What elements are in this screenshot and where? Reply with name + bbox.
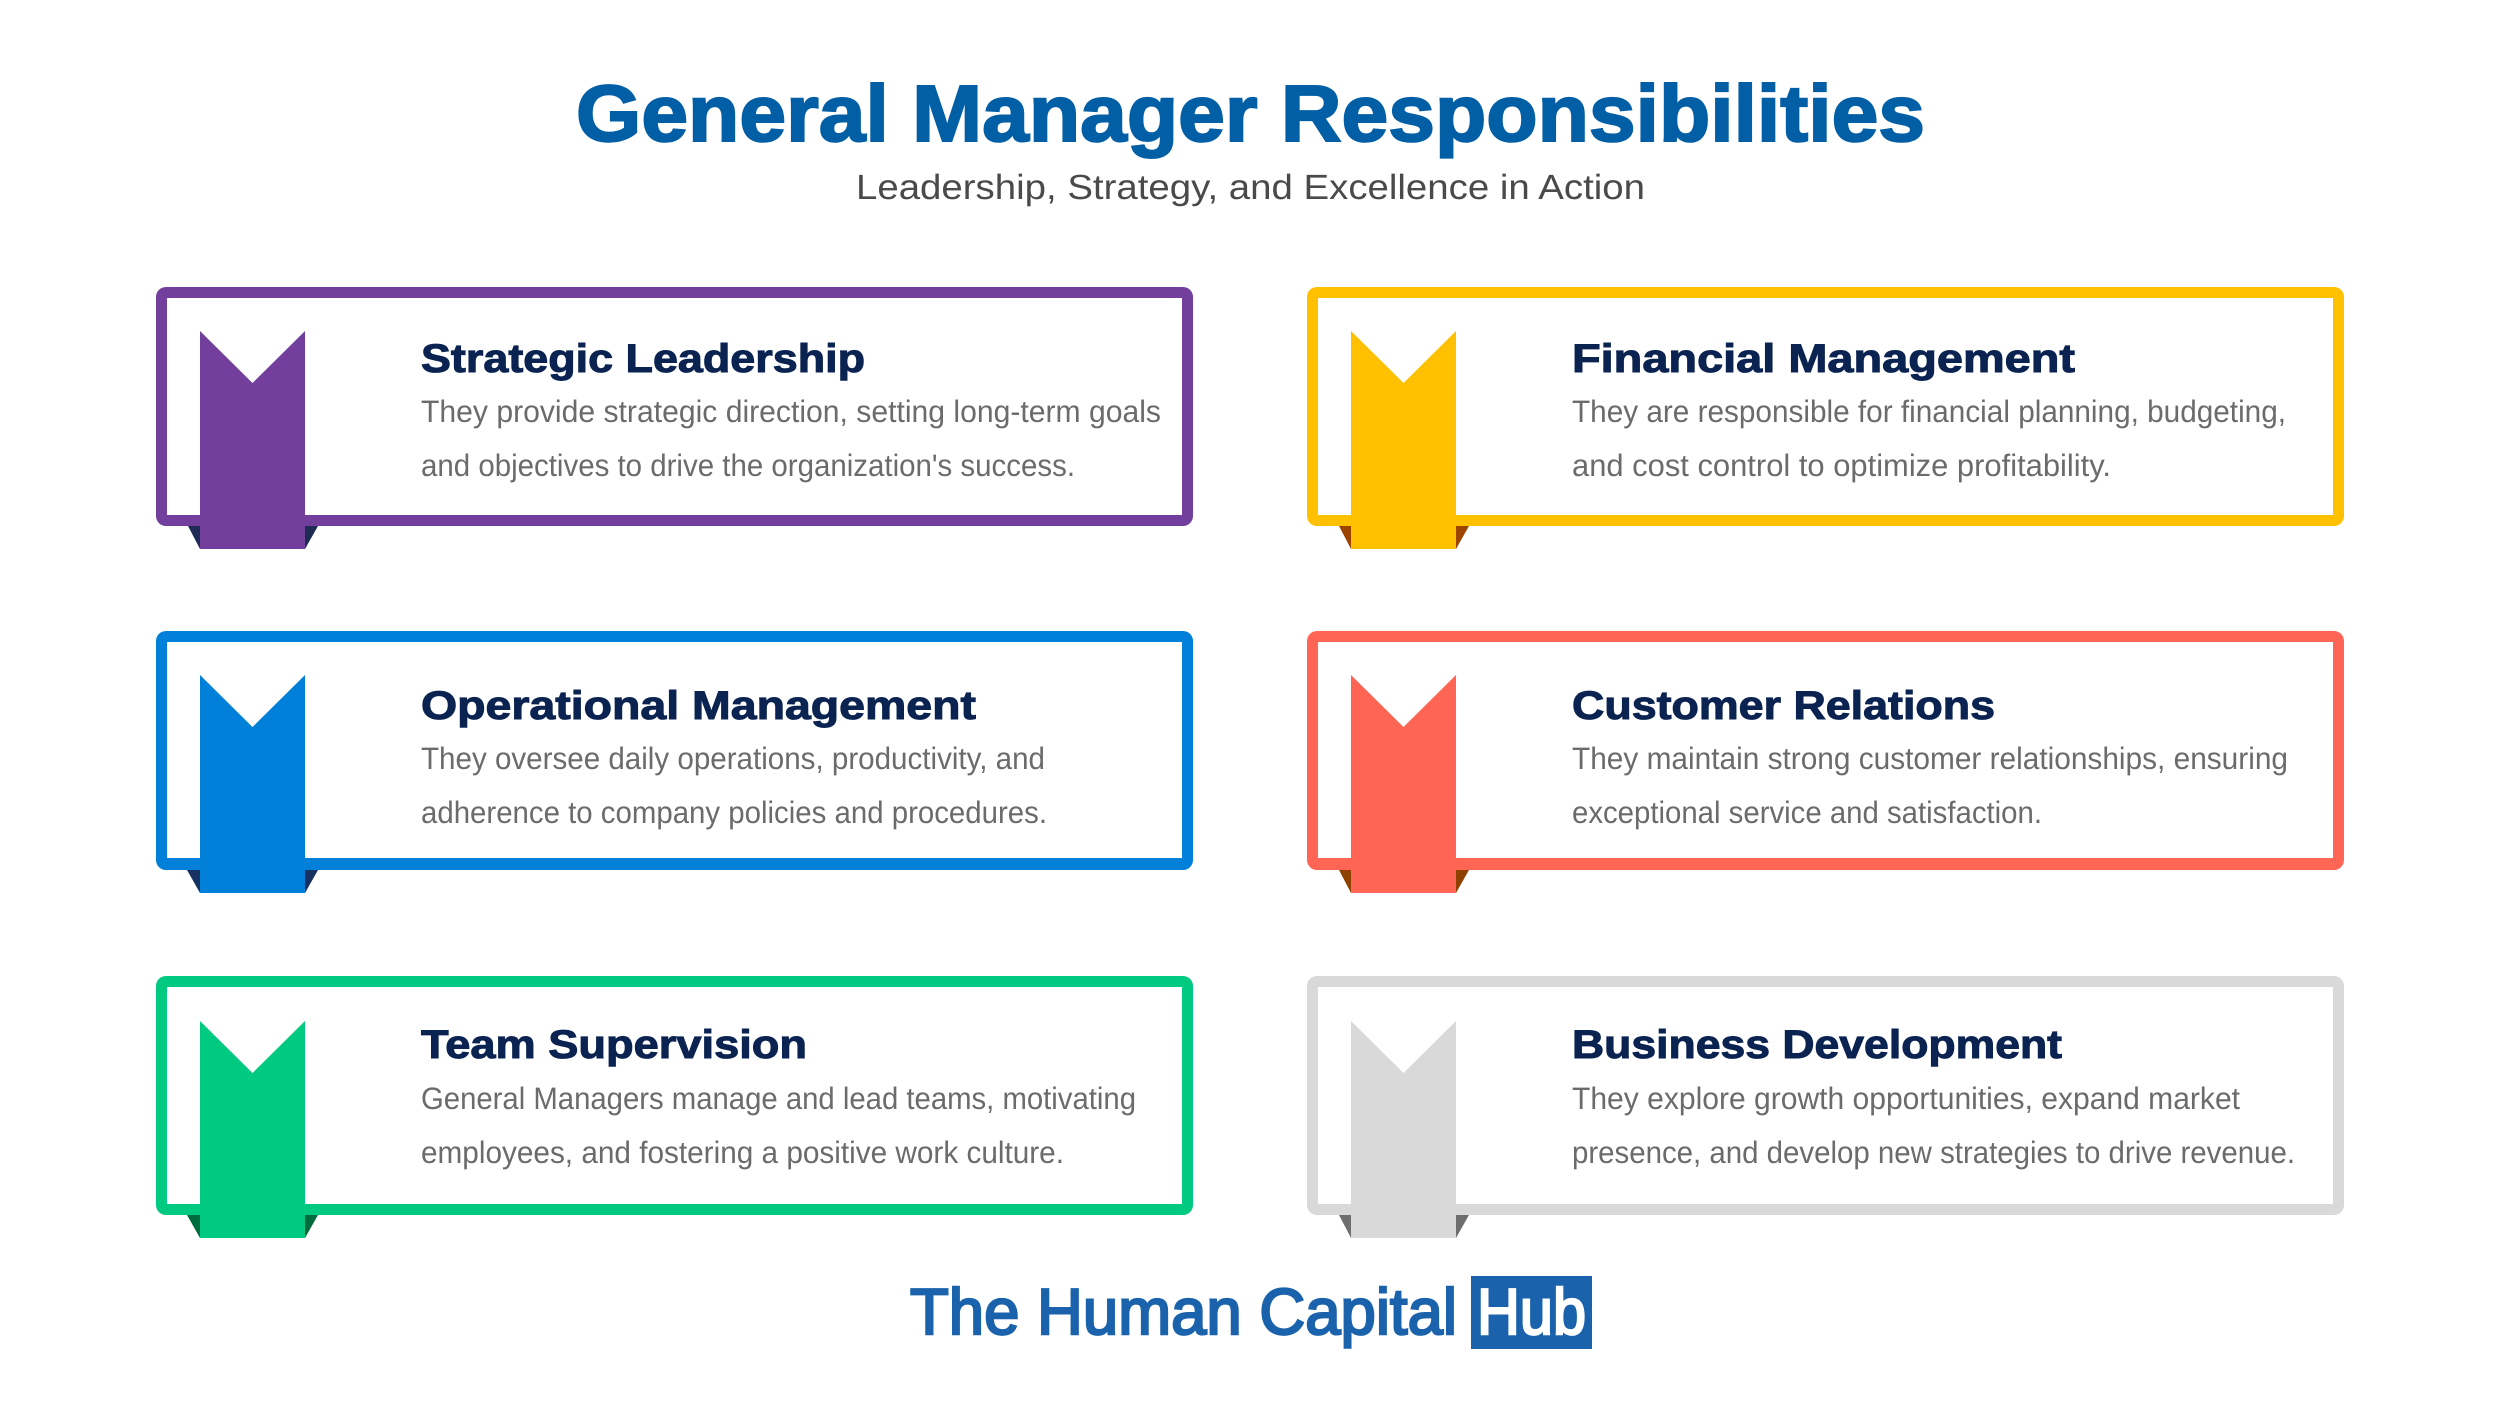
panel: Strategic Leadership: [156, 287, 1193, 549]
panel: Team Supervision: [156, 976, 1193, 1238]
description: [1572, 394, 2286, 483]
description: They provide strategic direction, setting long-term goals: [421, 394, 1161, 429]
logo wordmark: The Human Capital: [910, 1275, 1457, 1348]
panel border: [1307, 631, 2344, 870]
ribbon shadow: [1339, 526, 1469, 549]
ribbon shadow: [187, 1215, 318, 1238]
description: [421, 394, 1161, 483]
icon: ribbon: [200, 675, 305, 893]
description: [1572, 1081, 2295, 1170]
panel border: [156, 287, 1193, 526]
icon: ribbon: [1351, 331, 1456, 549]
icon: ribbon: [1351, 1021, 1456, 1238]
panel border: [1307, 287, 2344, 526]
panel: Business Development: [1307, 976, 2344, 1238]
title: General Manager Responsibilities: [576, 69, 1925, 158]
logo: The Human Capital Hub: [910, 1275, 1592, 1349]
panel: Financial Management: [1307, 287, 2344, 549]
heading: Customer Relations: [1572, 684, 1995, 728]
description: [421, 1081, 1136, 1170]
icon: ribbon: [200, 1021, 305, 1238]
description: [421, 741, 1047, 830]
panel: Operational Management: [156, 631, 1193, 893]
icon: ribbon: [1351, 675, 1456, 893]
ribbon shadow: [1339, 1215, 1469, 1238]
description: They explore growth opportunities, expand market: [1572, 1081, 2240, 1116]
panel border: [1307, 976, 2344, 1215]
description: employees, and fostering a positive work culture.: [421, 1135, 1064, 1170]
description: [1572, 741, 2288, 830]
description: adherence to company policies and procedures.: [421, 795, 1047, 830]
panel border: [156, 976, 1193, 1215]
description: They oversee daily operations, productivity, and: [421, 741, 1045, 776]
description: exceptional service and satisfaction.: [1572, 795, 2042, 830]
description: General Managers manage and lead teams, motivating: [421, 1081, 1136, 1116]
ribbon shadow: [188, 526, 318, 549]
logo badge text: Hub: [1477, 1275, 1586, 1348]
heading: Strategic Leadership: [421, 337, 865, 381]
logo badge: [1471, 1276, 1592, 1349]
panel: Customer Relations: [1307, 631, 2344, 893]
description: and cost control to optimize profitability.: [1572, 448, 2111, 483]
description: They are responsible for financial planning, budgeting,: [1572, 394, 2286, 429]
description: They maintain strong customer relationships, ensuring: [1572, 741, 2288, 776]
ribbon shadow: [187, 870, 318, 893]
panel border: [156, 631, 1193, 870]
description: and objectives to drive the organization's success.: [421, 448, 1075, 483]
heading: Financial Management: [1572, 337, 2075, 381]
subtitle: Leadership, Strategy, and Excellence in Action: [856, 168, 1645, 207]
icon: ribbon: [200, 331, 305, 549]
heading: Business Development: [1572, 1023, 2062, 1067]
description: presence, and develop new strategies to drive revenue.: [1572, 1135, 2295, 1170]
ribbon shadow: [1339, 870, 1469, 893]
heading: Operational Management: [421, 684, 976, 728]
heading: Team Supervision: [421, 1023, 807, 1067]
